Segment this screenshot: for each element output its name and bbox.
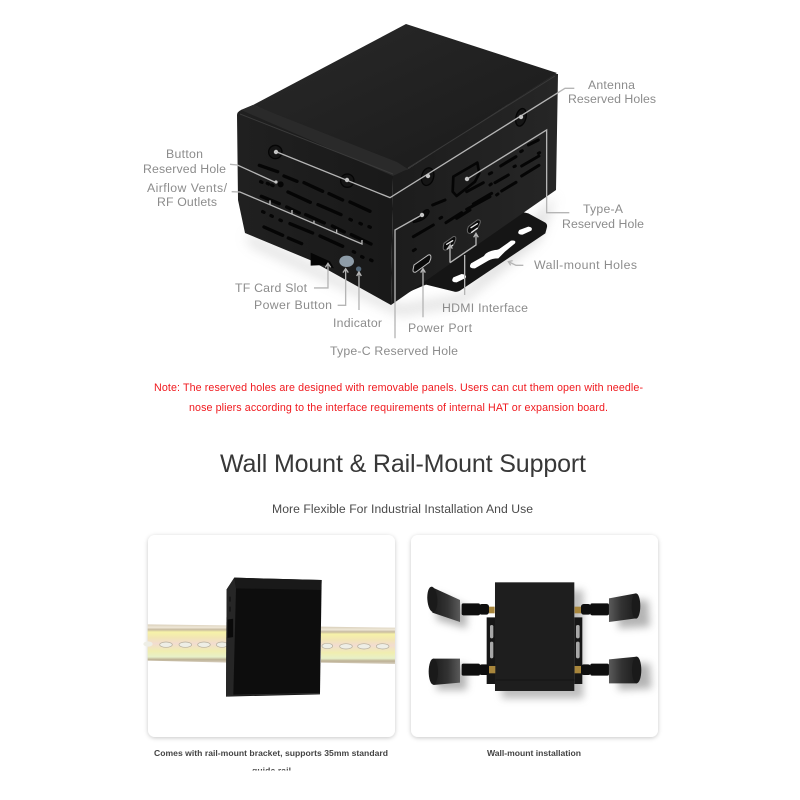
label: antenna reserved holes: Reserved Holes: [568, 92, 656, 106]
TF card slot, power button, indicator: [311, 253, 361, 272]
label: power port: Power Port: [408, 321, 473, 335]
label: airflow vents / rf outlets: RF Outlets: [157, 195, 217, 209]
panel: wall-mount photo card: [411, 535, 658, 737]
section heading: Wall Mount & Rail-Mount Support: [220, 450, 586, 478]
antenna bodies: [432, 587, 460, 622]
label: tf card slot: TF Card Slot: [235, 281, 308, 295]
left face vents: [259, 145, 372, 261]
note text in red: nose pliers according to the interface requirements of internal HAT or expansion board.: [189, 402, 608, 414]
device body: [495, 582, 574, 691]
label: button reserved hole: [143, 147, 226, 176]
caption: rail-mount: [154, 750, 388, 770]
antenna caps: [426, 586, 641, 685]
caption: rail-mount: guide rail: [252, 766, 291, 776]
label: type-a reserved hole: Reserved Hole: [562, 217, 644, 231]
caption: wall-mount: Wall-mount installation: [487, 748, 581, 758]
panel: rail-mount photo card: [143, 535, 395, 737]
label: type-a reserved hole: Type-A: [583, 202, 624, 216]
label: airflow vents / rf outlets: Airflow Vents/: [147, 181, 228, 195]
right face: [391, 74, 558, 305]
fold highlights: [240, 76, 555, 174]
lid top face: [253, 24, 557, 169]
label: type-a reserved hole: [562, 202, 644, 231]
connectors: [462, 603, 609, 676]
leader lines on right side: [276, 88, 574, 338]
label: wall-mount holes: Wall-mount Holes: [534, 258, 637, 272]
note text in red: [154, 382, 643, 414]
label: type-c reserved hole: Type-C Reserved Hole: [330, 344, 458, 358]
HDMI and power ports: [413, 220, 480, 272]
leader lines on left side: [230, 164, 362, 310]
mounting bracket: [400, 210, 547, 297]
enclosure on rail: [226, 578, 322, 697]
label: button reserved hole: Reserved Hole: [143, 162, 226, 176]
section subheading: More Flexible For Industrial Installation And Use: [272, 502, 533, 516]
enclosure shadow: [245, 195, 556, 315]
shadows: [502, 590, 583, 698]
leader dots: [274, 115, 523, 217]
label: antenna reserved holes: [568, 78, 656, 106]
product photo: enclosure with callouts: [143, 24, 656, 358]
left face: [237, 105, 408, 305]
label: hdmi interface: HDMI Interface: [442, 301, 528, 315]
fold band: [241, 105, 408, 176]
label: indicator: Indicator: [333, 316, 382, 330]
din rail: [143, 624, 395, 664]
device with antennas: [426, 582, 652, 698]
label: button reserved hole: Button: [166, 147, 203, 161]
label: airflow vents / rf outlets: [147, 181, 228, 209]
brackets: [487, 617, 582, 684]
label: antenna reserved holes: Antenna: [588, 78, 635, 92]
label: power button: Power Button: [254, 298, 332, 312]
caption: rail-mount: Comes with rail-mount bracket, supports 35mm standard: [154, 748, 388, 758]
note text in red: Note: The reserved holes are designed with removable panels. Users can cut them open with needle-: [154, 382, 643, 394]
right face vents and ports: [413, 107, 540, 251]
